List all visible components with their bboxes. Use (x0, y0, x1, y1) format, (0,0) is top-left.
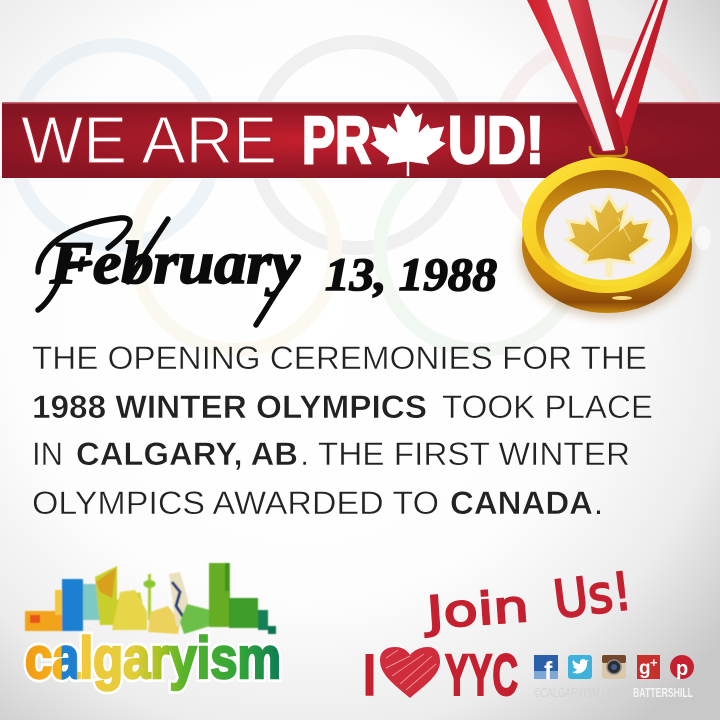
date script (38, 218, 497, 325)
icon: google plus (637, 655, 660, 679)
icon: google plus: + (650, 655, 658, 670)
line 3 bold: CALGARY, AB (76, 436, 298, 472)
medal rim (522, 177, 692, 313)
ribbon: back strap (613, 0, 668, 146)
credit line: BATTERSHILL (633, 685, 693, 700)
logo white halo: calgaryism (25, 626, 281, 691)
heading: UD!: UD! (448, 103, 544, 178)
calgaryism logo (25, 563, 281, 691)
line 4 bold: CANADA (450, 485, 593, 521)
line 2 bold: 1988 WINTER OLYMPICS (32, 389, 427, 425)
line 2 regular: TOOK PLACE (442, 389, 653, 425)
text: Join: Join (421, 581, 531, 639)
flourish on date (38, 218, 296, 325)
icon: white maple leaf (370, 103, 446, 176)
credit line: ©CALGARYISM / CODY (534, 685, 633, 700)
line 3 IN: IN (32, 436, 63, 472)
medal centre (544, 188, 670, 280)
heading: WE ARE: WE ARE (21, 103, 277, 178)
I love YYC (363, 643, 518, 708)
logo skyline (25, 563, 276, 634)
body text (32, 340, 653, 521)
medal highlights (612, 190, 711, 300)
date: 13, 1988: 13, 1988 (325, 249, 497, 301)
medal shadow (519, 186, 695, 318)
date: February: February (49, 230, 300, 296)
line 4 period: . (594, 485, 603, 521)
join us handwriting (421, 562, 635, 639)
line 3 regular: . THE FIRST WINTER (300, 436, 630, 472)
letter I: I (363, 643, 376, 708)
medal with ribbon (519, 0, 711, 318)
text: YYC: YYC (445, 643, 518, 708)
icon: scribbled heart (380, 647, 440, 698)
icon: pinterest: p (676, 658, 688, 680)
icon: google plus: g (639, 658, 651, 679)
icon: gold maple leaf (566, 196, 652, 276)
icon: facebook: f (544, 657, 553, 685)
heading: PR: PR (302, 103, 371, 178)
line 4 regular: OLYMPICS AWARDED TO (32, 485, 439, 521)
icon: twitter (568, 655, 592, 679)
olympic rings watermark (15, 42, 703, 350)
text: Us!: Us! (550, 562, 635, 631)
icon: facebook (534, 655, 558, 685)
icon: pinterest (670, 655, 694, 680)
line 1: THE OPENING CEREMONIES FOR THE (32, 340, 647, 376)
icon: instagram (602, 655, 626, 679)
logo wordmark: calgaryism (25, 626, 281, 691)
medal loop (590, 146, 627, 156)
header band (2, 102, 720, 178)
social icons (534, 655, 694, 700)
medal inner band (536, 170, 678, 286)
ribbon: front strap (527, 0, 625, 152)
medal ring (522, 157, 692, 293)
